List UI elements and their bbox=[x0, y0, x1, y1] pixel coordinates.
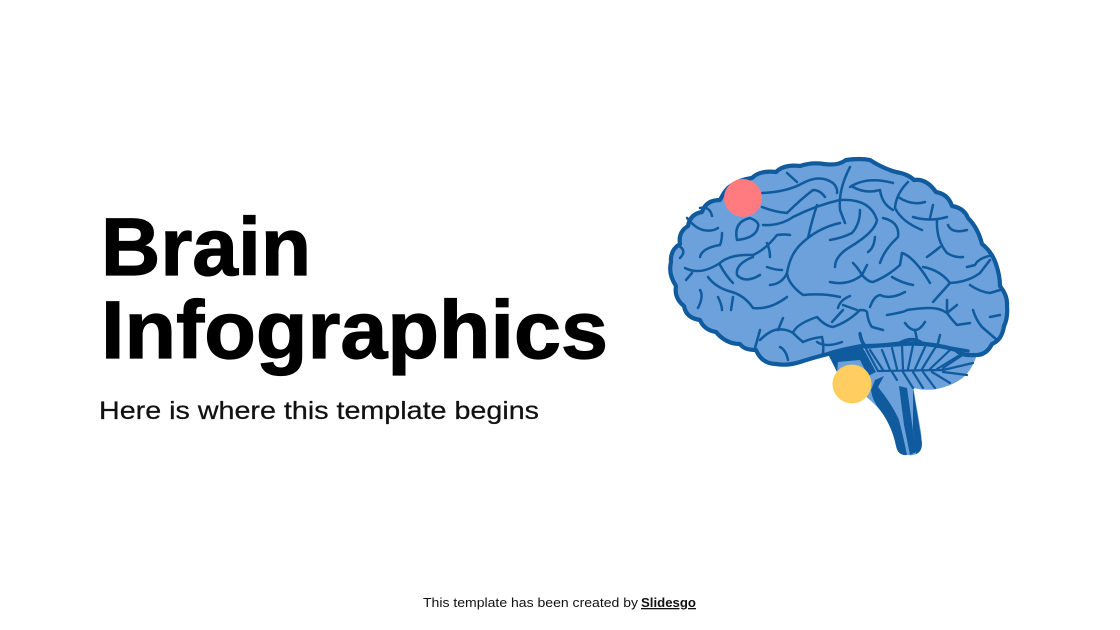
title: Infographics bbox=[101, 285, 608, 376]
footer credit: This template has been created by bbox=[423, 595, 639, 610]
brain illustration bbox=[670, 159, 1007, 455]
cerebellum folds bbox=[865, 345, 973, 388]
title: Brain bbox=[101, 202, 311, 293]
brainstem bbox=[828, 350, 922, 455]
subtitle: Here is where this template begins bbox=[99, 397, 539, 425]
cortex folds bbox=[677, 167, 1000, 360]
cortex bbox=[670, 159, 1007, 365]
marker: red circle bbox=[724, 179, 762, 217]
marker: yellow circle bbox=[832, 364, 872, 404]
thick fold at lower cortex bbox=[860, 334, 968, 351]
footer credit: Slidesgo bbox=[641, 595, 696, 610]
cerebellum bbox=[862, 340, 978, 390]
brainstem dark bands bbox=[828, 346, 922, 455]
title bbox=[101, 202, 608, 376]
